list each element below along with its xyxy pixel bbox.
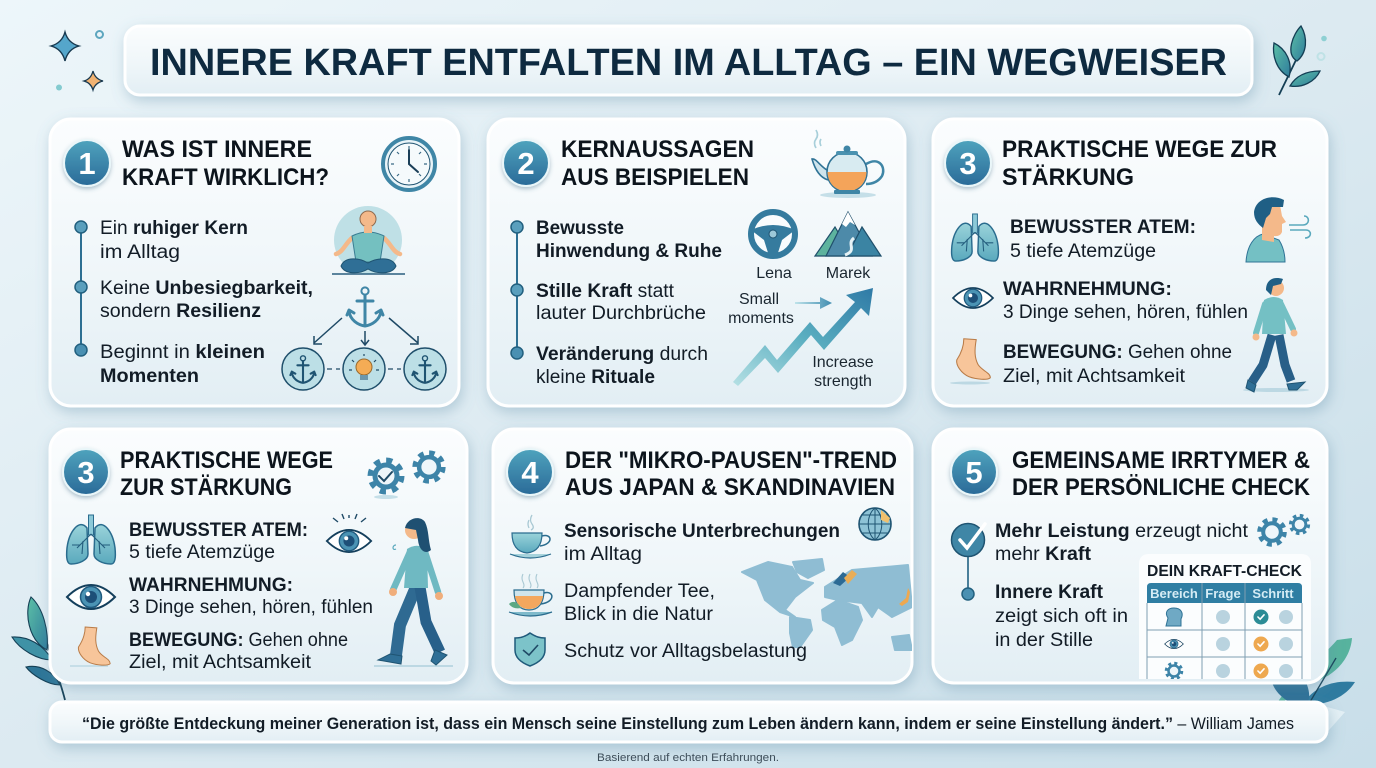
number badge 4: [507, 449, 553, 495]
breathing text: 5 tiefe Atemzüge: [1010, 241, 1156, 262]
labels lena and marek: Lena: [756, 265, 792, 282]
icon: foot lower: [70, 627, 110, 666]
movement text: Ziel, mit Achtsamkeit: [1003, 366, 1186, 387]
bullet texts 1: sondern Resilienz: [100, 301, 261, 322]
icon: lungs: [952, 214, 998, 261]
text tee: [564, 581, 715, 625]
text irrtum: mehr Kraft: [995, 544, 1092, 565]
text sensorik: [564, 521, 840, 565]
panel 1: was ist innere kraft: [50, 119, 459, 406]
bullet texts 1: Momenten: [100, 366, 199, 387]
heading 2: [561, 136, 754, 191]
heading 5: [565, 447, 897, 501]
title banner: INNERE KRAFT ENTFALTEN IM ALLTAG – EIN WEGWEISER: [150, 42, 1227, 84]
movement text: BEWEGUNG: Gehen ohne: [1003, 342, 1232, 363]
text tee: Blick in die Natur: [564, 604, 714, 625]
panel 3: praktische wege (oben): [933, 119, 1327, 406]
number badge 1: [64, 140, 110, 186]
bullet texts 2: Bewusste: [536, 218, 624, 239]
decorative leaves bottom left: [12, 597, 65, 700]
bullet texts 2: lauter Durchbrüche: [536, 303, 706, 324]
text irrtum: in der Stille: [995, 630, 1093, 651]
icon: teapot: [812, 130, 883, 198]
growth arrow: [733, 288, 873, 386]
icon: walking woman: [374, 518, 453, 666]
card title: DEIN KRAFT-CHECK: [1147, 563, 1302, 580]
number badge 2: 2: [517, 146, 535, 181]
increase strength label: [812, 354, 874, 390]
world map: [742, 559, 912, 650]
bullet texts 2: kleine Rituale: [536, 367, 655, 388]
perception text lower: WAHRNEHMUNG:: [129, 575, 293, 596]
timeline 1: [75, 221, 87, 356]
bullet texts 2: Stille Kraft statt: [536, 281, 675, 302]
icon: walking man: [1243, 278, 1309, 392]
heading 1: KRAFT WIRKLICH?: [122, 164, 329, 191]
number badge 2: [503, 140, 549, 186]
icon: breathing man: [1246, 197, 1310, 262]
labels lena and marek: [756, 265, 871, 282]
text schutz: Schutz vor Alltagsbelastung: [564, 641, 807, 662]
bullet texts 1: [100, 218, 313, 387]
icon: shield: [515, 633, 545, 666]
heading 4: PRAKTISCHE WEGE: [120, 447, 333, 474]
movement text lower: BEWEGUNG: Gehen ohne: [129, 630, 348, 651]
icon: eye: [953, 288, 993, 308]
kraft-check card: [1139, 554, 1311, 679]
icon: eye lower: [67, 585, 115, 609]
movement text lower: [129, 630, 348, 673]
table: Frage: [1205, 586, 1241, 601]
text irrtum: Mehr Leistung erzeugt nicht: [995, 521, 1249, 542]
heading 2: KERNAUSSAGEN: [561, 136, 754, 163]
heading 4: ZUR STÄRKUNG: [120, 474, 292, 501]
icon: mountains: [815, 212, 881, 256]
timeline with check: [952, 524, 985, 600]
panel 2: kernaussagen: [488, 119, 905, 406]
heading 1: [122, 136, 329, 191]
text irrtum: zeigt sich oft in: [995, 606, 1128, 627]
number badge 3 lower: [63, 449, 109, 495]
perception text: WAHRNEHMUNG:: [1003, 279, 1172, 300]
small moments label and arrow: [728, 291, 832, 327]
table: [1147, 583, 1302, 679]
quote bar: “Die größte Entdeckung meiner Generation ist, dass ein Mensch seine Einstellung zum Leben ändern kann, indem er seine Einstellung ändert.” – William James: [82, 714, 1294, 733]
decorative leaves bottom right: [1271, 638, 1355, 708]
icon: cup: [510, 515, 551, 558]
number badge 1: 1: [78, 146, 96, 181]
text irrtum: Innere Kraft: [995, 582, 1104, 603]
icon: clock: [383, 138, 435, 190]
number badge 4: 4: [521, 455, 539, 490]
perception text: 3 Dinge sehen, hören, fühlen: [1003, 302, 1248, 323]
icon: foot: [950, 339, 990, 384]
decorative sparkles top left: [51, 31, 103, 90]
table: Bereich: [1150, 586, 1198, 601]
text sensorik: im Alltag: [564, 544, 642, 565]
heading 3: PRAKTISCHE WEGE ZUR: [1002, 136, 1277, 163]
icon: anchor with arrows: [314, 287, 418, 345]
heading 5: AUS JAPAN & SKANDINAVIEN: [565, 474, 895, 501]
panel 4: praktische wege (unten): [50, 429, 467, 683]
heading 6: GEMEINSAME IRRTYMER &: [1012, 447, 1310, 474]
icon: gears with check: [370, 453, 443, 499]
breathing text lower: [129, 520, 308, 563]
bullet texts 1: Keine Unbesiegbarkeit,: [100, 278, 313, 299]
bullet texts 1: Ein ruhiger Kern: [100, 218, 248, 239]
text sensorik: Sensorische Unterbrechungen: [564, 521, 840, 542]
heading 3: [1002, 136, 1277, 191]
heading 6: [1012, 447, 1311, 501]
breathing text lower: BEWUSSTER ATEM:: [129, 520, 308, 541]
number badge 5: [951, 449, 997, 495]
table: Schritt: [1252, 586, 1294, 601]
title banner: [125, 26, 1252, 95]
small moments label and arrow: moments: [728, 310, 794, 327]
text irrtum: [995, 521, 1249, 651]
text tee: Dampfender Tee,: [564, 581, 715, 602]
panel 5: mikro-pausen: [493, 429, 912, 683]
footer note: Basierend auf echten Erfahrungen.: [597, 752, 779, 764]
quote bar: [50, 702, 1345, 742]
labels lena and marek: Marek: [826, 265, 871, 282]
heading 5: DER "MIKRO-PAUSEN"-TREND: [565, 447, 897, 474]
movement text: [1003, 342, 1232, 387]
decorative leaf sprig top right: [1274, 26, 1327, 95]
perception text: [1003, 279, 1248, 323]
movement text lower: Ziel, mit Achtsamkeit: [129, 652, 312, 673]
icon: meditating figure: [332, 206, 405, 274]
breathing text: [1010, 217, 1196, 262]
heading 3: STÄRKUNG: [1002, 164, 1134, 191]
breathing text: BEWUSSTER ATEM:: [1010, 217, 1196, 238]
heading 4: [120, 447, 333, 501]
perception text lower: [129, 575, 373, 618]
icon: gears: [1260, 516, 1308, 544]
icon: eye with rays: [327, 514, 371, 552]
panel 6: irrtuemer und check: [933, 429, 1327, 683]
number badge 5: 5: [965, 455, 983, 490]
perception text lower: 3 Dinge sehen, hören, fühlen: [129, 597, 373, 618]
number badge 3: [945, 140, 991, 186]
number badge 3: 3: [959, 146, 977, 181]
icon: steering wheel: [751, 212, 795, 256]
icon: tea cup with leaf: [509, 574, 552, 616]
bullet texts 1: im Alltag: [100, 242, 180, 263]
bullet texts 2: [536, 218, 722, 388]
icon: lungs lower: [67, 515, 115, 564]
heading 1: WAS IST INNERE: [122, 136, 312, 163]
breathing text lower: 5 tiefe Atemzüge: [129, 542, 275, 563]
number badge 3 lower: 3: [77, 455, 95, 490]
increase strength label: Increase: [812, 354, 874, 371]
heading 2: AUS BEISPIELEN: [561, 164, 749, 191]
increase strength label: strength: [814, 373, 872, 390]
icon row: anchors and bulb: [282, 348, 446, 390]
heading 6: DER PERSÖNLICHE CHECK: [1012, 474, 1311, 501]
bullet texts 2: Veränderung durch: [536, 344, 708, 365]
bullet texts 2: Hinwendung & Ruhe: [536, 241, 722, 262]
small moments label and arrow: Small: [739, 291, 779, 308]
icon: globe: [859, 508, 891, 540]
bullet texts 1: Beginnt in kleinen: [100, 342, 265, 363]
timeline 2: [511, 221, 523, 359]
